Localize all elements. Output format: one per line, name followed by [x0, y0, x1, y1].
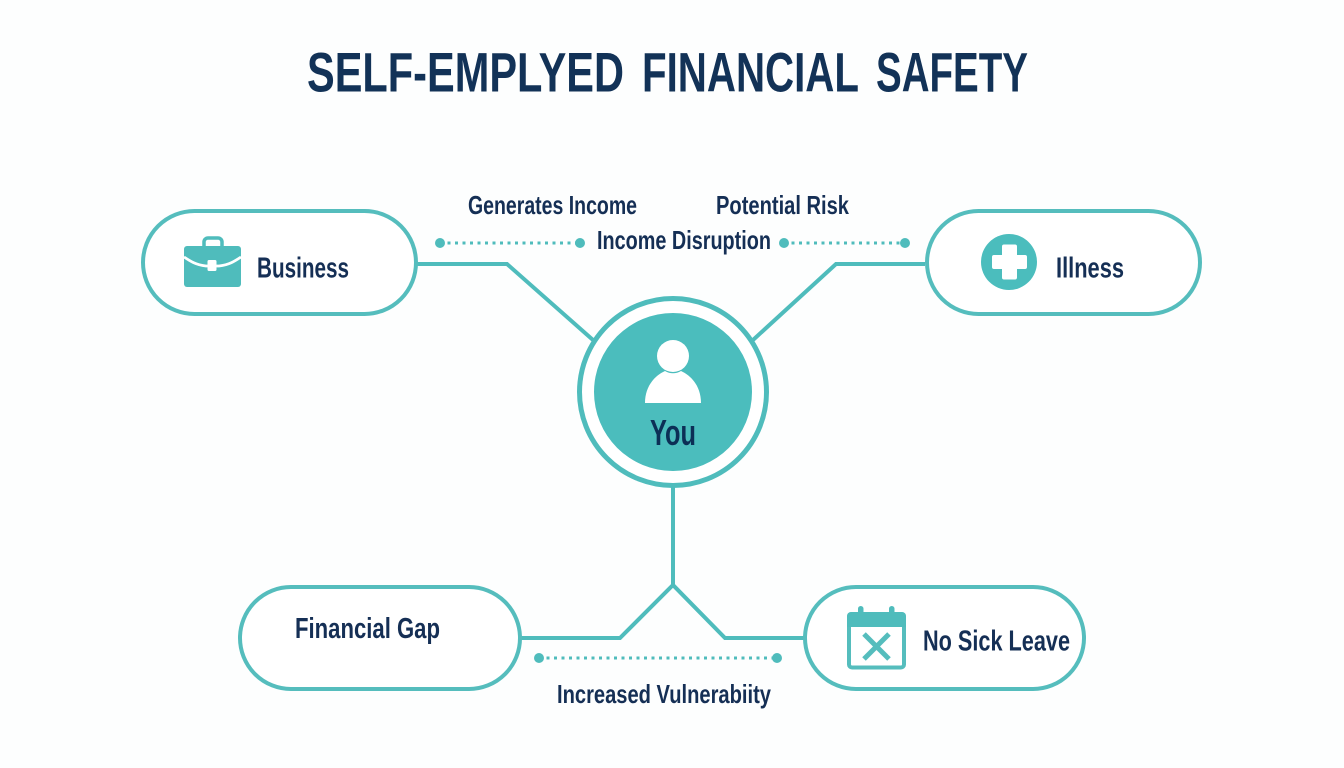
dotted link: left: [435, 238, 585, 248]
title: SELF-EMPLYED: [307, 40, 624, 104]
title: SAFETY: [876, 40, 1028, 104]
label: no sick leave: No Sick Leave: [923, 626, 1070, 658]
label: increased vulnerability: Increased Vulnerabiity: [557, 679, 771, 709]
label: income disruption: Income Disruption: [597, 225, 771, 255]
connector: business to you: [417, 264, 593, 340]
label: illness: Illness: [1056, 252, 1124, 284]
panel: you hub: [580, 298, 766, 486]
connector: you to lower branches: [521, 487, 804, 638]
icon: medical cross: [981, 234, 1037, 290]
connector: illness to you: [753, 264, 925, 340]
label: potential risk: Potential Risk: [716, 190, 849, 220]
panel: no sick leave: [805, 587, 1084, 689]
label: you: You: [650, 412, 696, 453]
dotted link: right: [779, 238, 910, 248]
panel: financial gap: [240, 587, 520, 689]
dotted link: bottom: [534, 653, 782, 663]
icon: briefcase: [184, 238, 241, 287]
icon: person: [645, 340, 701, 403]
title: [307, 40, 1028, 104]
label: generates income: Generates Income: [468, 190, 637, 220]
icon: calendar with x: [847, 606, 906, 668]
panel: business: [143, 211, 416, 314]
panel: illness: [927, 211, 1200, 314]
title: FINANCIAL: [642, 40, 859, 104]
label: business: Business: [257, 252, 349, 284]
label: financial gap: Financial Gap: [295, 613, 440, 645]
